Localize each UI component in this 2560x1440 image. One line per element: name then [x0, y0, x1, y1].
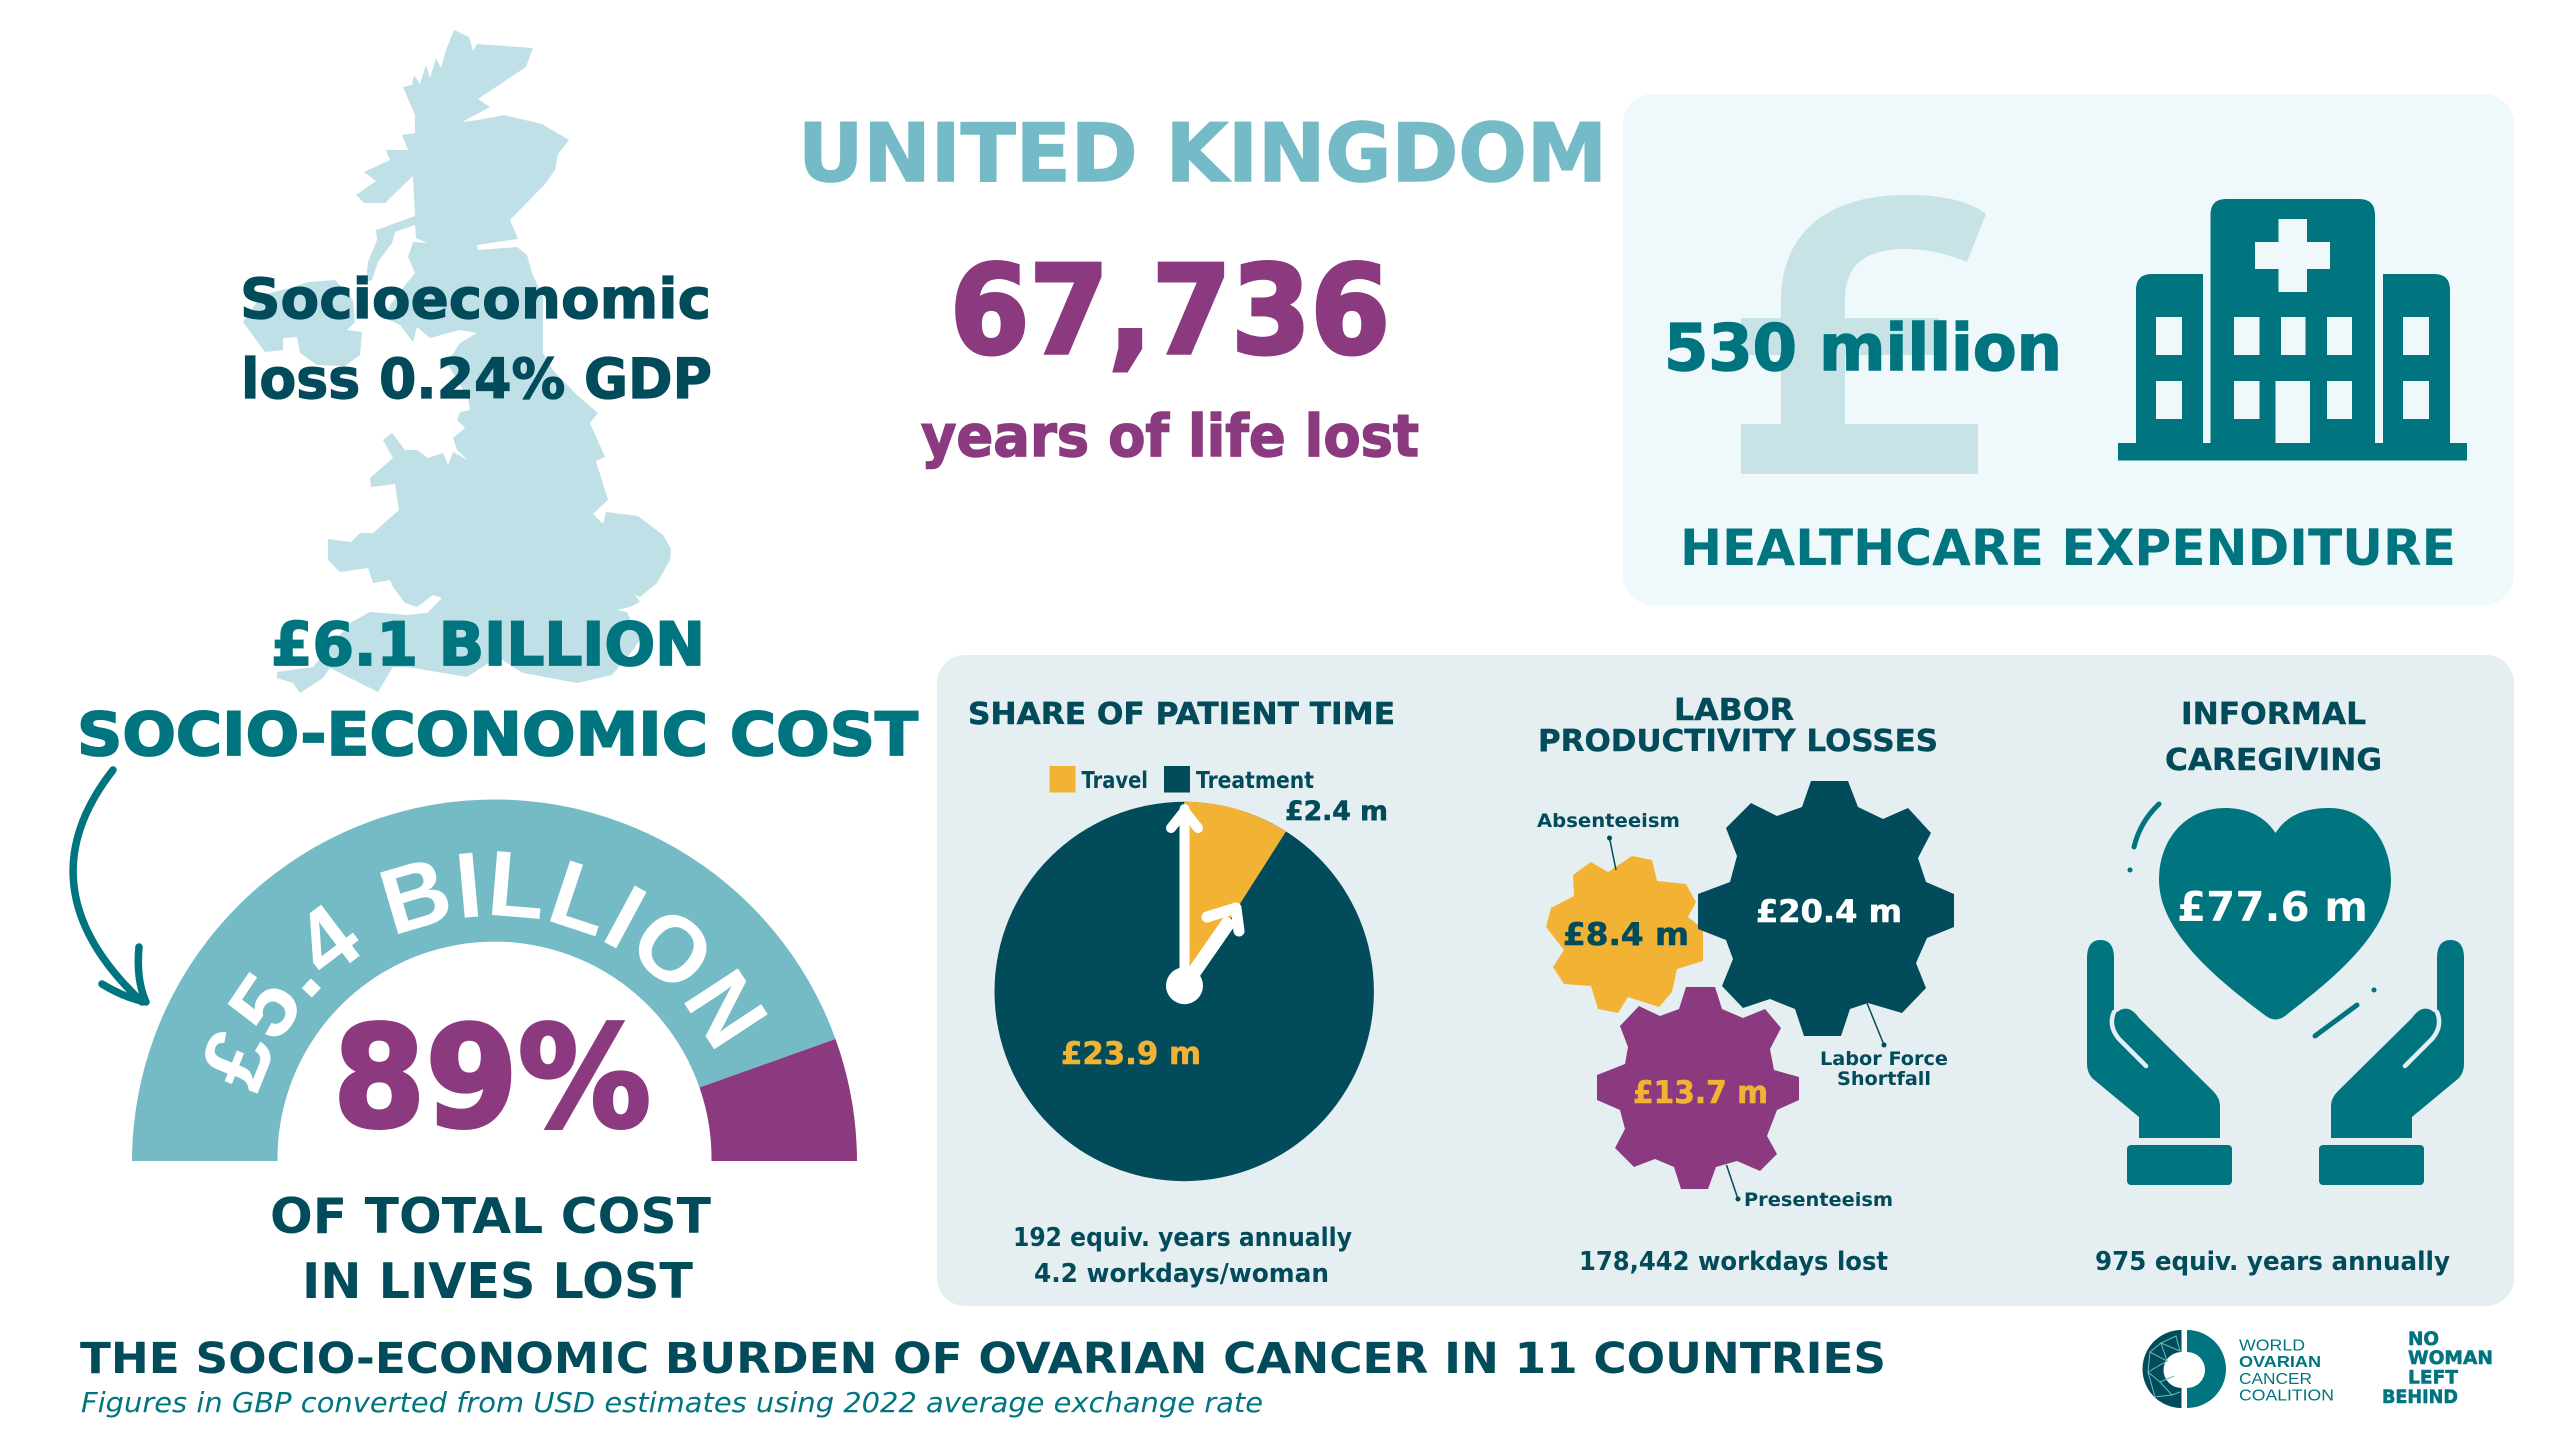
section: informal caregiving — [2087, 697, 2464, 1277]
value: informal caregiving: £77.6 m — [2177, 883, 2368, 931]
logo: No Woman Left Behind: BEHIND — [2382, 1386, 2458, 1408]
chart: half-donut gauge — [132, 800, 857, 1161]
footer: note on currency: Figures in GBP converted from USD estimates using 2022 average exchange rate — [81, 1386, 1263, 1419]
text: of total cost in lives lost: OF TOTAL COST — [270, 1188, 712, 1245]
text: of total cost in lives lost: IN LIVES LOST — [302, 1253, 694, 1310]
icon: pound sign — [1741, 195, 1986, 474]
text: curved gauge label: £5.4 BILLION — [205, 851, 768, 1094]
text: of total cost in lives lost — [270, 1188, 712, 1310]
heading: informal caregiving: INFORMAL — [2181, 697, 2366, 732]
icon: absenteeism gear — [1546, 856, 1703, 1013]
icon: left hand — [2087, 940, 2232, 1185]
heading: labor productivity losses: PRODUCTIVITY LOSSES — [1538, 724, 1938, 759]
stat: years of life lost: 67,736 — [950, 240, 1390, 382]
icon: presenteeism gear — [1597, 987, 1799, 1189]
logo: World Ovarian Cancer Coalition — [2142, 1330, 2334, 1408]
label: absenteeism — [1537, 810, 1680, 870]
icon: right hand — [2319, 940, 2464, 1185]
logo: No Woman Left Behind: LEFT — [2408, 1366, 2458, 1388]
logo: World Ovarian Cancer Coalition: CANCER — [2239, 1371, 2312, 1388]
legend: travel and treatment — [1050, 766, 1314, 794]
label: absenteeism: Absenteeism — [1537, 810, 1680, 832]
heading: socio-economic cost total — [77, 610, 918, 770]
panel: indirect costs — [937, 655, 2514, 1306]
legend: travel and treatment: Treatment — [1196, 768, 1314, 794]
heading: labor productivity losses — [1538, 693, 1938, 759]
value: labor force shortfall: £20.4 m — [1756, 894, 1902, 930]
map: United Kingdom silhouette — [243, 30, 671, 693]
logo: World Ovarian Cancer Coalition: COALITION — [2239, 1388, 2334, 1404]
label: labor force shortfall: Labor Force — [1820, 1048, 1948, 1070]
caption: patient time: 192 equiv. years annually — [1013, 1223, 1352, 1253]
label: labor force shortfall — [1820, 1003, 1948, 1090]
stat: years of life lost: years of life lost — [921, 402, 1419, 470]
footer: report title: THE SOCIO-ECONOMIC BURDEN OF OVARIAN CANCER IN 11 COUNTRIES — [80, 1334, 1886, 1384]
stat: GDP loss: loss 0.24% GDP — [241, 347, 712, 411]
panel: healthcare expenditure — [1623, 94, 2514, 605]
label: presenteeism: Presenteeism — [1744, 1189, 1893, 1211]
stat: GDP loss: Socioeconomic — [240, 267, 711, 331]
caption: equivalent years: 975 equiv. years annually — [2095, 1247, 2450, 1277]
heading: informal caregiving — [2165, 697, 2382, 778]
heading: socio-economic cost total: SOCIO-ECONOMIC COST — [77, 700, 918, 770]
logo: No Woman Left Behind: WOMAN — [2408, 1347, 2493, 1369]
stat: GDP loss — [240, 267, 712, 411]
icon: labor force shortfall gear — [1698, 781, 1954, 1036]
text: 89 percent: 89% — [333, 997, 651, 1160]
title: United Kingdom: UNITED KINGDOM — [798, 107, 1607, 200]
text: healthcare expenditure label: HEALTHCARE EXPENDITURE — [1680, 519, 2456, 577]
heading: informal caregiving: CAREGIVING — [2165, 743, 2382, 778]
section: labor productivity losses — [1537, 693, 1954, 1277]
value: absenteeism: £8.4 m — [1563, 917, 1689, 953]
heading: labor productivity losses: LABOR — [1674, 693, 1794, 728]
stat: years of life lost — [921, 240, 1419, 470]
section: share of patient time — [968, 697, 1395, 1289]
text: 530 million: 530 million — [1664, 312, 2062, 386]
label: labor force shortfall: Shortfall — [1837, 1068, 1931, 1090]
value: treatment: £23.9 m — [1061, 1036, 1201, 1072]
icon: heart — [2159, 808, 2391, 1020]
caption: workdays lost: 178,442 workdays lost — [1579, 1247, 1888, 1277]
arrow: cost to gauge — [73, 770, 146, 1002]
logo: World Ovarian Cancer Coalition: OVARIAN — [2239, 1354, 2321, 1371]
heading: socio-economic cost total: £6.1 BILLION — [271, 610, 705, 680]
value: travel: £2.4 m — [1285, 796, 1388, 827]
caption: patient time: 4.2 workdays/woman — [1034, 1259, 1329, 1289]
chart: pie and clock hands — [994, 802, 1374, 1181]
value: presenteeism: £13.7 m — [1633, 1075, 1768, 1111]
icon: hospital — [2118, 199, 2467, 460]
label: presenteeism — [1726, 1165, 1893, 1211]
icon: sparkle marks — [2128, 804, 2376, 1036]
logo: No Woman Left Behind — [2382, 1328, 2493, 1408]
logo: World Ovarian Cancer Coalition: WORLD — [2239, 1338, 2305, 1354]
caption: patient time — [1013, 1223, 1352, 1289]
heading: share of patient time: SHARE OF PATIENT TIME — [968, 697, 1395, 732]
logo: No Woman Left Behind: NO — [2408, 1328, 2439, 1350]
legend: travel and treatment: Travel — [1082, 768, 1148, 794]
